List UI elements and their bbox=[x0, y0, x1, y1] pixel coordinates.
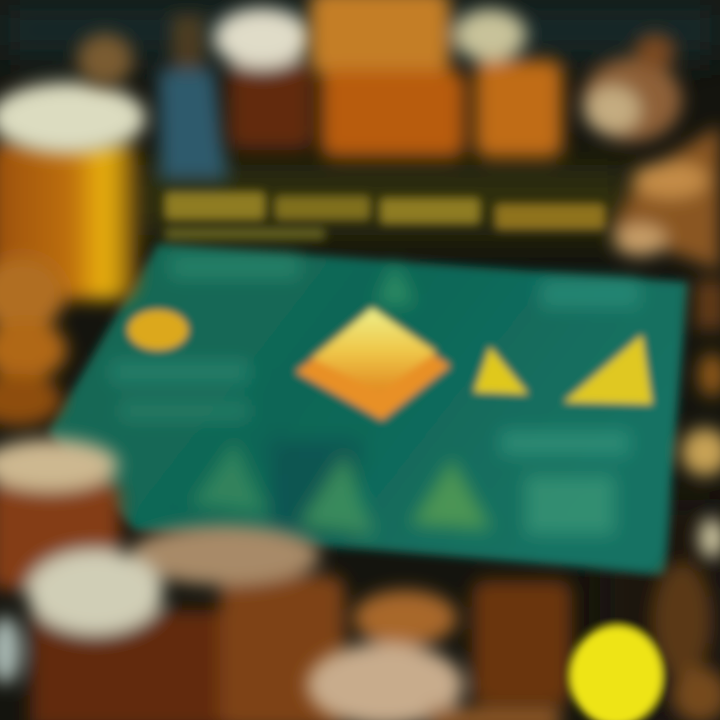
icon: bottom-left mugs bbox=[0, 439, 345, 720]
heading: blurred golden title bbox=[165, 192, 605, 240]
icon: bottom center snacks bbox=[307, 562, 720, 720]
icon: left snack stack bbox=[0, 257, 67, 426]
icon: top foamy glass bbox=[214, 8, 313, 150]
icon: central gold diamond bbox=[296, 308, 450, 420]
icon: bottle bbox=[158, 15, 228, 180]
icon: small cork bbox=[77, 34, 133, 86]
icon: right side snacks bbox=[610, 125, 720, 558]
chart: yellow triangles bbox=[474, 335, 652, 404]
icon: gold oval bbox=[128, 310, 188, 350]
icon: top pretzels and snacks bbox=[310, 0, 682, 158]
icon: yellow coin bbox=[570, 626, 662, 720]
chart texture bbox=[110, 255, 640, 540]
panel: green chart board bbox=[48, 244, 688, 574]
icon: beer mug left bbox=[0, 82, 146, 300]
